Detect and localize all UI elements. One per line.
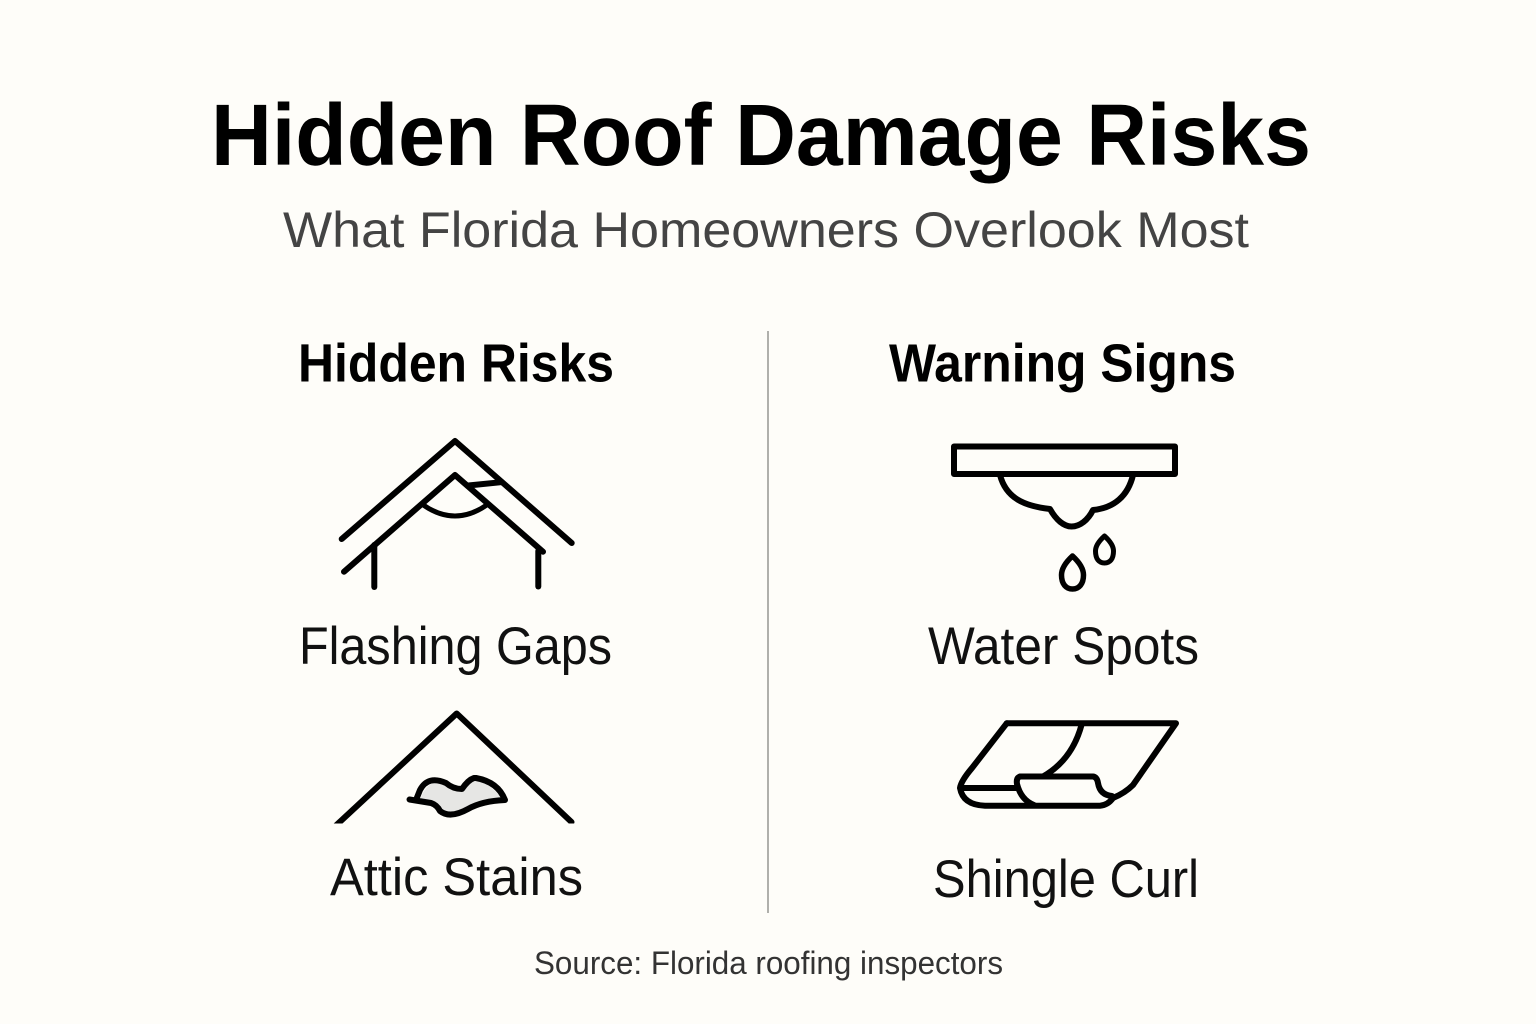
heading: hidden risks: Hidden Risks xyxy=(298,334,614,394)
label: flashing gaps: Flashing Gaps xyxy=(299,617,612,676)
panel: hidden risks xyxy=(298,334,614,907)
title: Hidden Roof Damage Risks xyxy=(211,87,1311,184)
divider between columns xyxy=(767,331,769,913)
label: attic stains: Attic Stains xyxy=(330,848,583,907)
heading: warning signs: Warning Signs xyxy=(889,334,1236,394)
source note: Source: Florida roofing inspectors xyxy=(534,945,1003,981)
subtitle: What Florida Homeowners Overlook Most xyxy=(283,202,1249,258)
icon: water spots xyxy=(954,446,1175,589)
label: water spots: Water Spots xyxy=(928,617,1199,676)
icon: attic stains xyxy=(330,714,572,831)
label: shingle curl: Shingle Curl xyxy=(933,850,1199,909)
panel: warning signs xyxy=(889,334,1236,909)
icon: shingle curl xyxy=(960,723,1176,806)
icon: flashing gaps roof xyxy=(342,441,572,587)
